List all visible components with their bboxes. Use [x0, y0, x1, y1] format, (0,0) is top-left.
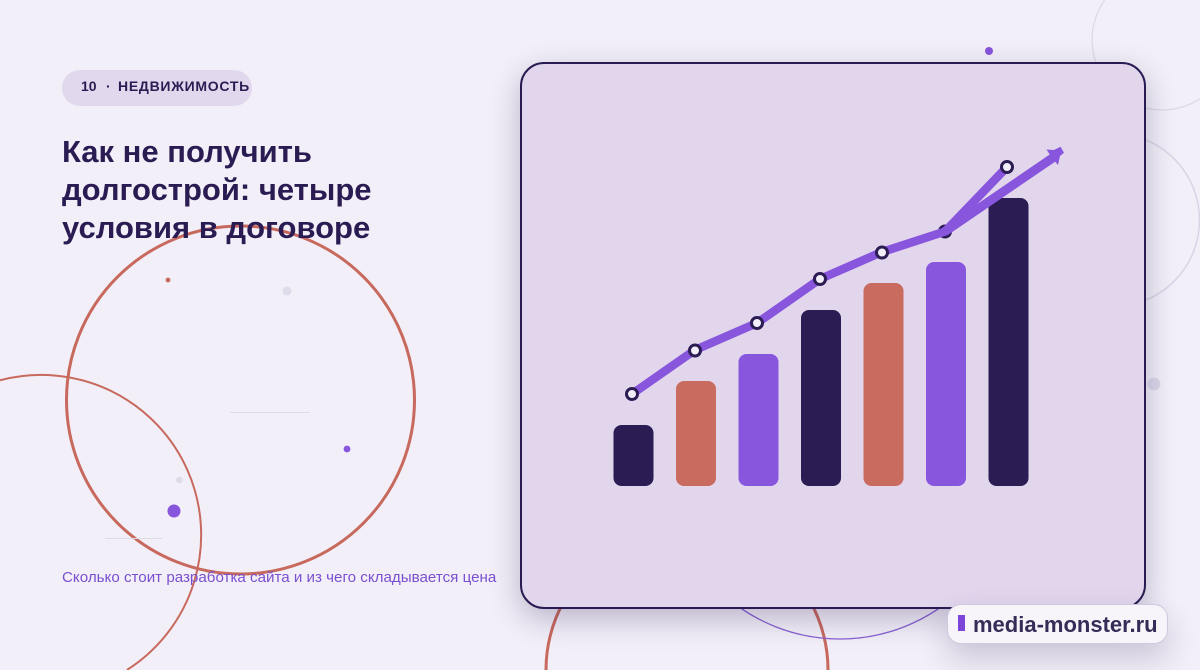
category pill: ·	[106, 78, 111, 94]
watermark badge: media-monster.ru	[973, 612, 1158, 637]
category pill	[62, 70, 252, 106]
subtitle: Сколько стоит разработка сайта и из чего складывается цена	[62, 569, 496, 586]
watermark badge	[947, 604, 1168, 644]
bars	[614, 198, 1028, 486]
panel: chart card	[520, 62, 1146, 609]
category pill: 10	[81, 78, 97, 94]
title	[62, 134, 372, 245]
trend line with markers	[626, 147, 1064, 400]
category pill: НЕДВИЖИМОСТЬ	[118, 78, 250, 94]
title: Как не получить	[62, 134, 312, 169]
title: долгострой: четыре	[62, 172, 372, 207]
title: условия в договоре	[62, 210, 370, 245]
